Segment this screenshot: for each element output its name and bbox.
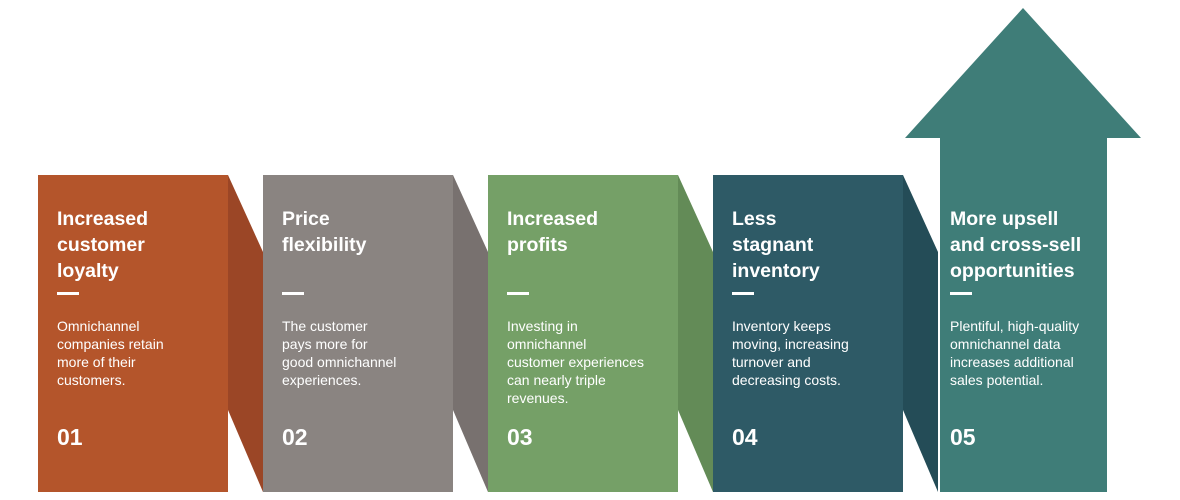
fold 2 (453, 175, 488, 492)
panel 4: inventory (732, 260, 820, 282)
panel 5 text: and cross-sell (950, 234, 1081, 256)
panel 3: profits (507, 234, 568, 256)
panel 1: companies retain (57, 336, 164, 352)
panel 2: pays more for (282, 336, 368, 352)
panel 4: 04 (732, 424, 758, 450)
panel 2: Price (282, 208, 330, 230)
panel 1: 01 (57, 424, 83, 450)
panel 3: Investing in (507, 318, 578, 334)
panel 1: more of their (57, 354, 136, 370)
panel 3: customer experiences (507, 354, 644, 370)
panel 3 (488, 175, 678, 492)
panel 2: 02 (282, 424, 308, 450)
panel 2: The customer (282, 318, 368, 334)
panel 2: experiences. (282, 372, 361, 388)
arrow 5 (905, 8, 1141, 492)
fold 4 (903, 175, 938, 492)
panel 3: 03 (507, 424, 533, 450)
panel 5 text: opportunities (950, 260, 1075, 282)
panel 1: loyalty (57, 260, 119, 282)
panel 2: good omnichannel (282, 354, 396, 370)
panel 4: turnover and (732, 354, 811, 370)
panel 1 (38, 175, 228, 492)
panel 5 text: increases additional (950, 354, 1074, 370)
fold 3 (678, 175, 713, 492)
panel 5 text: omnichannel data (950, 336, 1061, 352)
panel 5 text (950, 208, 1081, 450)
panel 1: Increased (57, 208, 148, 230)
panel 2: flexibility (282, 234, 367, 256)
panel 5 text: sales potential. (950, 372, 1043, 388)
panel 5 text: More upsell (950, 208, 1058, 230)
panel 3: can nearly triple (507, 372, 606, 388)
fold 1 (228, 175, 263, 492)
panel 1: customers. (57, 372, 125, 388)
panel 1: customer (57, 234, 145, 256)
panel 4: Less (732, 208, 776, 230)
panel 2 (263, 175, 453, 492)
panel 1: Omnichannel (57, 318, 140, 334)
panel 4: moving, increasing (732, 336, 849, 352)
panel 3: revenues. (507, 390, 568, 406)
panel 4: Inventory keeps (732, 318, 831, 334)
panel 4: decreasing costs. (732, 372, 841, 388)
panel 5 text: 05 (950, 424, 976, 450)
panel 3: omnichannel (507, 336, 586, 352)
panel 5 text: Plentiful, high-quality (950, 318, 1079, 334)
panel 4: stagnant (732, 234, 813, 256)
panel 4 (713, 175, 903, 492)
panel 3: Increased (507, 208, 598, 230)
